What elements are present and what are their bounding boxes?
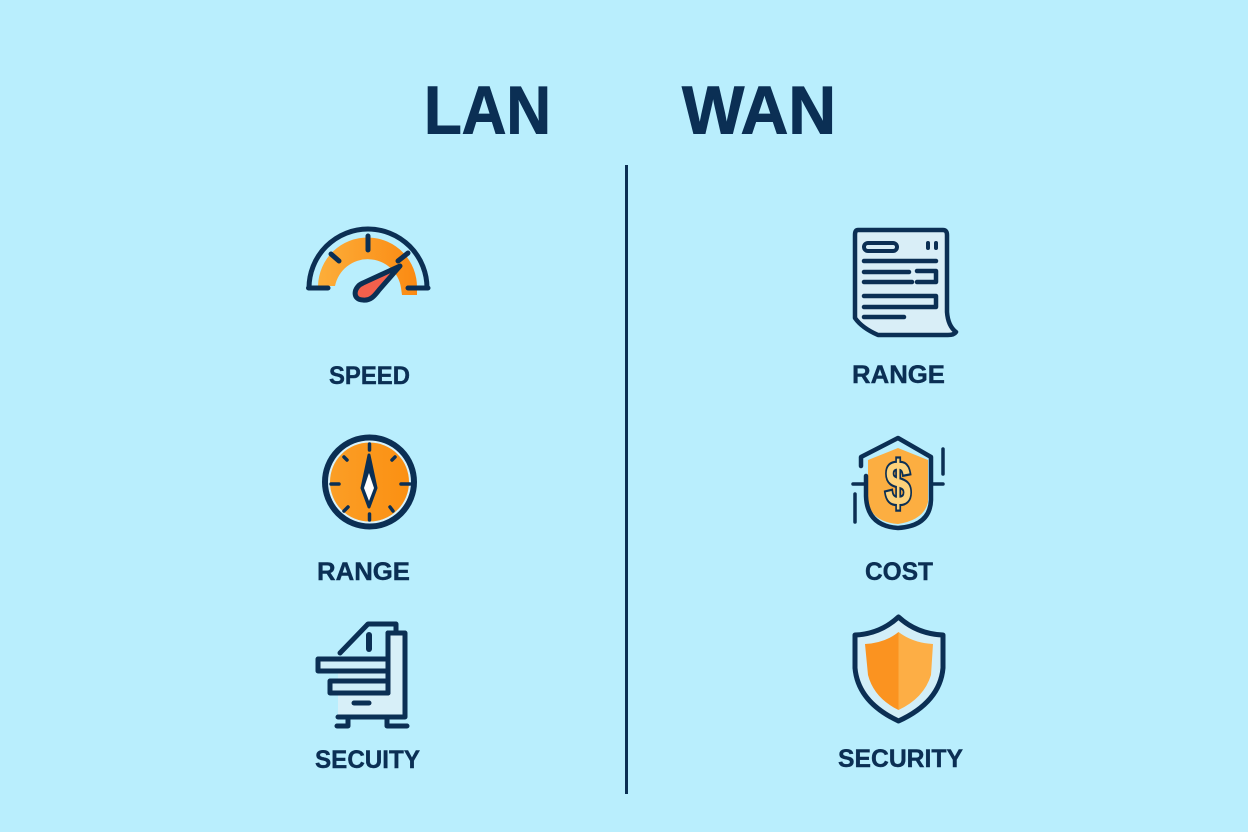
label: COST: COST <box>865 558 933 586</box>
title: WAN: WAN <box>682 72 836 148</box>
label: SPEED: SPEED <box>329 362 410 390</box>
title: LAN: LAN <box>424 72 551 148</box>
label: RANGE (WAN): RANGE <box>852 361 945 389</box>
icon: compass <box>325 438 414 526</box>
label: RANGE (LAN): RANGE <box>317 558 410 586</box>
icon: printer-like device <box>318 624 407 726</box>
icon: dollar shield <box>853 438 943 528</box>
label: SECURITY: SECURITY <box>838 745 963 773</box>
dollar sign: $ <box>885 448 911 519</box>
icon: document <box>855 230 956 335</box>
icon: speedometer <box>308 229 428 300</box>
icon: shield <box>855 617 943 721</box>
label: SECUITY: SECUITY <box>315 746 420 774</box>
center divider <box>625 165 628 794</box>
